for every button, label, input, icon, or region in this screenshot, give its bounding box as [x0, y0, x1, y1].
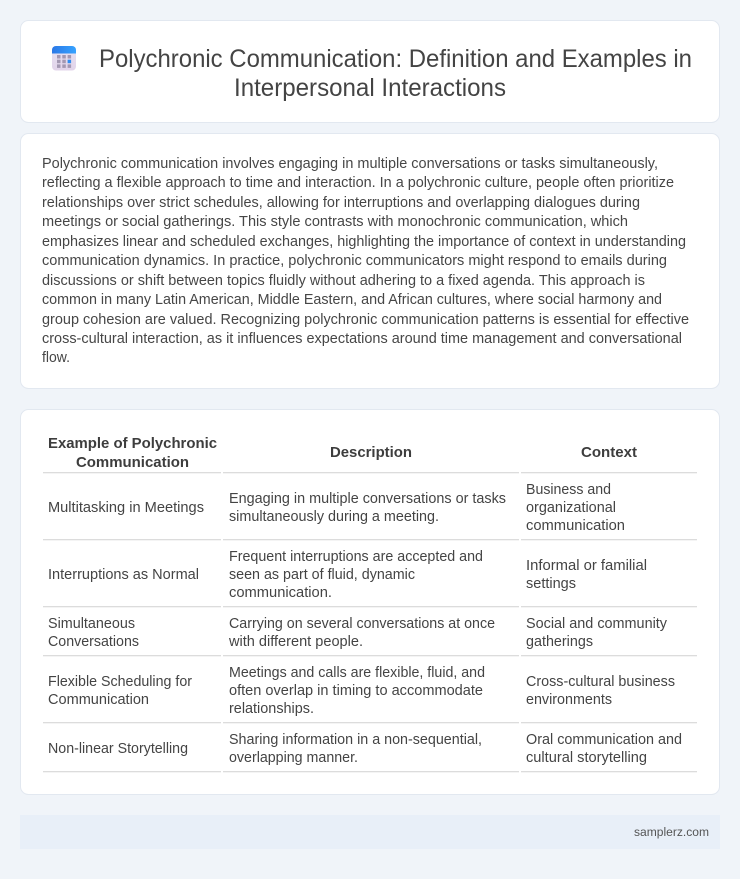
table row: interruptions as normal: seen as part of fluid, dynamic [229, 567, 416, 583]
text block: definition paragraph: common in many Latin American, Middle Eastern, and African cultures, where social harmony and [42, 292, 662, 308]
table header row: Communication [76, 454, 189, 471]
panel: examples table card [20, 410, 720, 794]
table row: flexible scheduling for communication [48, 665, 675, 717]
text block: definition paragraph: flow. [42, 350, 70, 366]
table row: flexible scheduling for communication: Cross-cultural business [526, 674, 675, 690]
table row: non-linear storytelling: cultural storytelling [526, 750, 647, 766]
table row: non-linear storytelling: Sharing information in a non-sequential, [229, 732, 482, 748]
text block: definition paragraph: cross-cultural interaction, as it influences expectations around time management and conversational [42, 331, 682, 347]
text block: definition paragraph: discussions or shift between topics fluidly without adhering to a fixed agenda. This approach is [42, 273, 645, 289]
title: Interpersonal Interactions [234, 74, 506, 102]
table row: flexible scheduling for communication: environments [526, 692, 612, 708]
table row: flexible scheduling for communication: often overlap in timing to accommodate [229, 683, 483, 699]
table header row: Context [581, 444, 637, 461]
text block: definition paragraph: group cohesion are valued. Recognizing polychronic communication patterns is essential for effective [42, 312, 689, 328]
table row: flexible scheduling for communication: Flexible Scheduling for [48, 674, 192, 690]
table row: non-linear storytelling: Oral communication and [526, 732, 682, 748]
icon: calendar [52, 46, 76, 70]
table row: interruptions as normal: communication. [229, 585, 332, 601]
text block: definition paragraph [42, 156, 689, 366]
table: examples of polychronic communication [43, 435, 697, 772]
table row: non-linear storytelling: Non-linear Storytelling [48, 741, 188, 757]
table row: multitasking in meetings: Business and [526, 482, 611, 498]
table header row: Example of Polychronic [48, 435, 217, 452]
text block: definition paragraph: reflecting a flexible approach to time and interaction. In a polychronic culture, people often prioritize [42, 175, 674, 191]
text block: definition paragraph: relationships over strict schedules, allowing for interruptions and overlapping dialogues during [42, 195, 640, 211]
table row: interruptions as normal: Interruptions as Normal [48, 567, 199, 583]
table row: flexible scheduling for communication: Meetings and calls are flexible, fluid, and [229, 665, 485, 681]
title: Polychronic Communication: Definition and Examples in [99, 45, 692, 73]
table row: multitasking in meetings: organizational [526, 500, 616, 516]
table row: interruptions as normal [48, 549, 647, 601]
table row: interruptions as normal: Informal or familial [526, 558, 647, 574]
panel: introduction text card [20, 134, 720, 388]
text block: definition paragraph: meetings or social gatherings. This style contrasts with monochronic communication, which [42, 214, 628, 230]
table row: simultaneous conversations: with different people. [228, 634, 363, 650]
table row: multitasking in meetings: Engaging in multiple conversations or tasks [229, 491, 506, 507]
table row: simultaneous conversations: Carrying on several conversations at once [229, 616, 495, 632]
table row: interruptions as normal: settings [526, 576, 576, 592]
table row: simultaneous conversations: gatherings [526, 634, 593, 650]
table row: multitasking in meetings: communication [526, 518, 625, 534]
text block: definition paragraph: emphasizes linear and scheduled exchanges, highlighting the importance of context in understanding [42, 234, 686, 250]
table row: simultaneous conversations: Conversations [48, 634, 139, 650]
table row: flexible scheduling for communication: relationships. [229, 701, 314, 717]
text block: definition paragraph: Polychronic communication involves engaging in multiple conversations or tasks simultaneously, [42, 156, 658, 172]
table row: non-linear storytelling [48, 732, 682, 766]
table row: multitasking in meetings: simultaneously during a meeting. [229, 509, 439, 525]
table row: simultaneous conversations: Simultaneous [48, 616, 135, 632]
table row: non-linear storytelling: overlapping manner. [229, 750, 358, 766]
panel: header card [20, 20, 720, 122]
table header row [48, 435, 637, 471]
footer text: source: samplerz.com [634, 825, 709, 839]
title [99, 45, 692, 102]
footer bar [20, 815, 720, 849]
table row: multitasking in meetings: Multitasking in Meetings [48, 500, 204, 516]
text block: definition paragraph: communication dynamics. In practice, polychronic communicators might respond to emails during [42, 253, 667, 269]
table header row: Description [330, 444, 412, 461]
table row: simultaneous conversations: Social and community [526, 616, 668, 632]
table row: multitasking in meetings [48, 482, 625, 534]
table row: flexible scheduling for communication: Communication [48, 692, 149, 708]
table row: simultaneous conversations [48, 616, 668, 650]
table row: interruptions as normal: Frequent interruptions are accepted and [229, 549, 483, 565]
